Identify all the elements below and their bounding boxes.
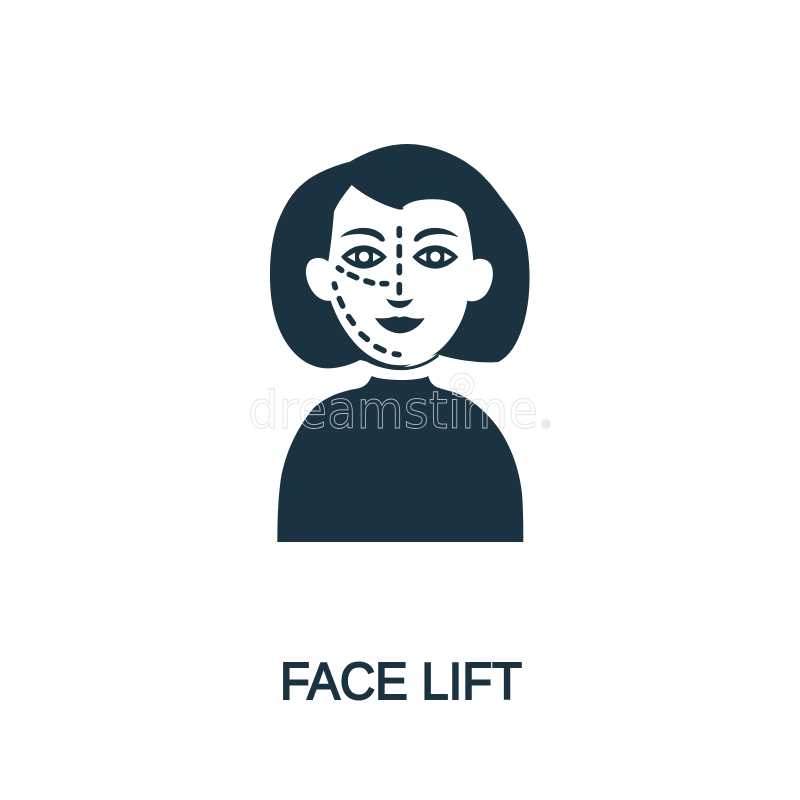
watermark spiral logo xyxy=(450,373,474,397)
title: FACE LIFT xyxy=(280,653,522,711)
watermark wordmark: dreamstime xyxy=(248,381,538,441)
watermark registered mark xyxy=(541,419,551,429)
chin outline xyxy=(360,355,438,369)
eyes xyxy=(341,245,458,269)
face xyxy=(306,185,493,369)
body xyxy=(277,376,523,542)
watermark xyxy=(248,373,551,441)
dashed surgical markings xyxy=(334,229,399,355)
eyebrows xyxy=(340,228,459,242)
hair xyxy=(270,144,530,369)
nose xyxy=(386,298,413,308)
icon: woman with face lift markings xyxy=(270,144,530,542)
lips xyxy=(375,316,425,333)
